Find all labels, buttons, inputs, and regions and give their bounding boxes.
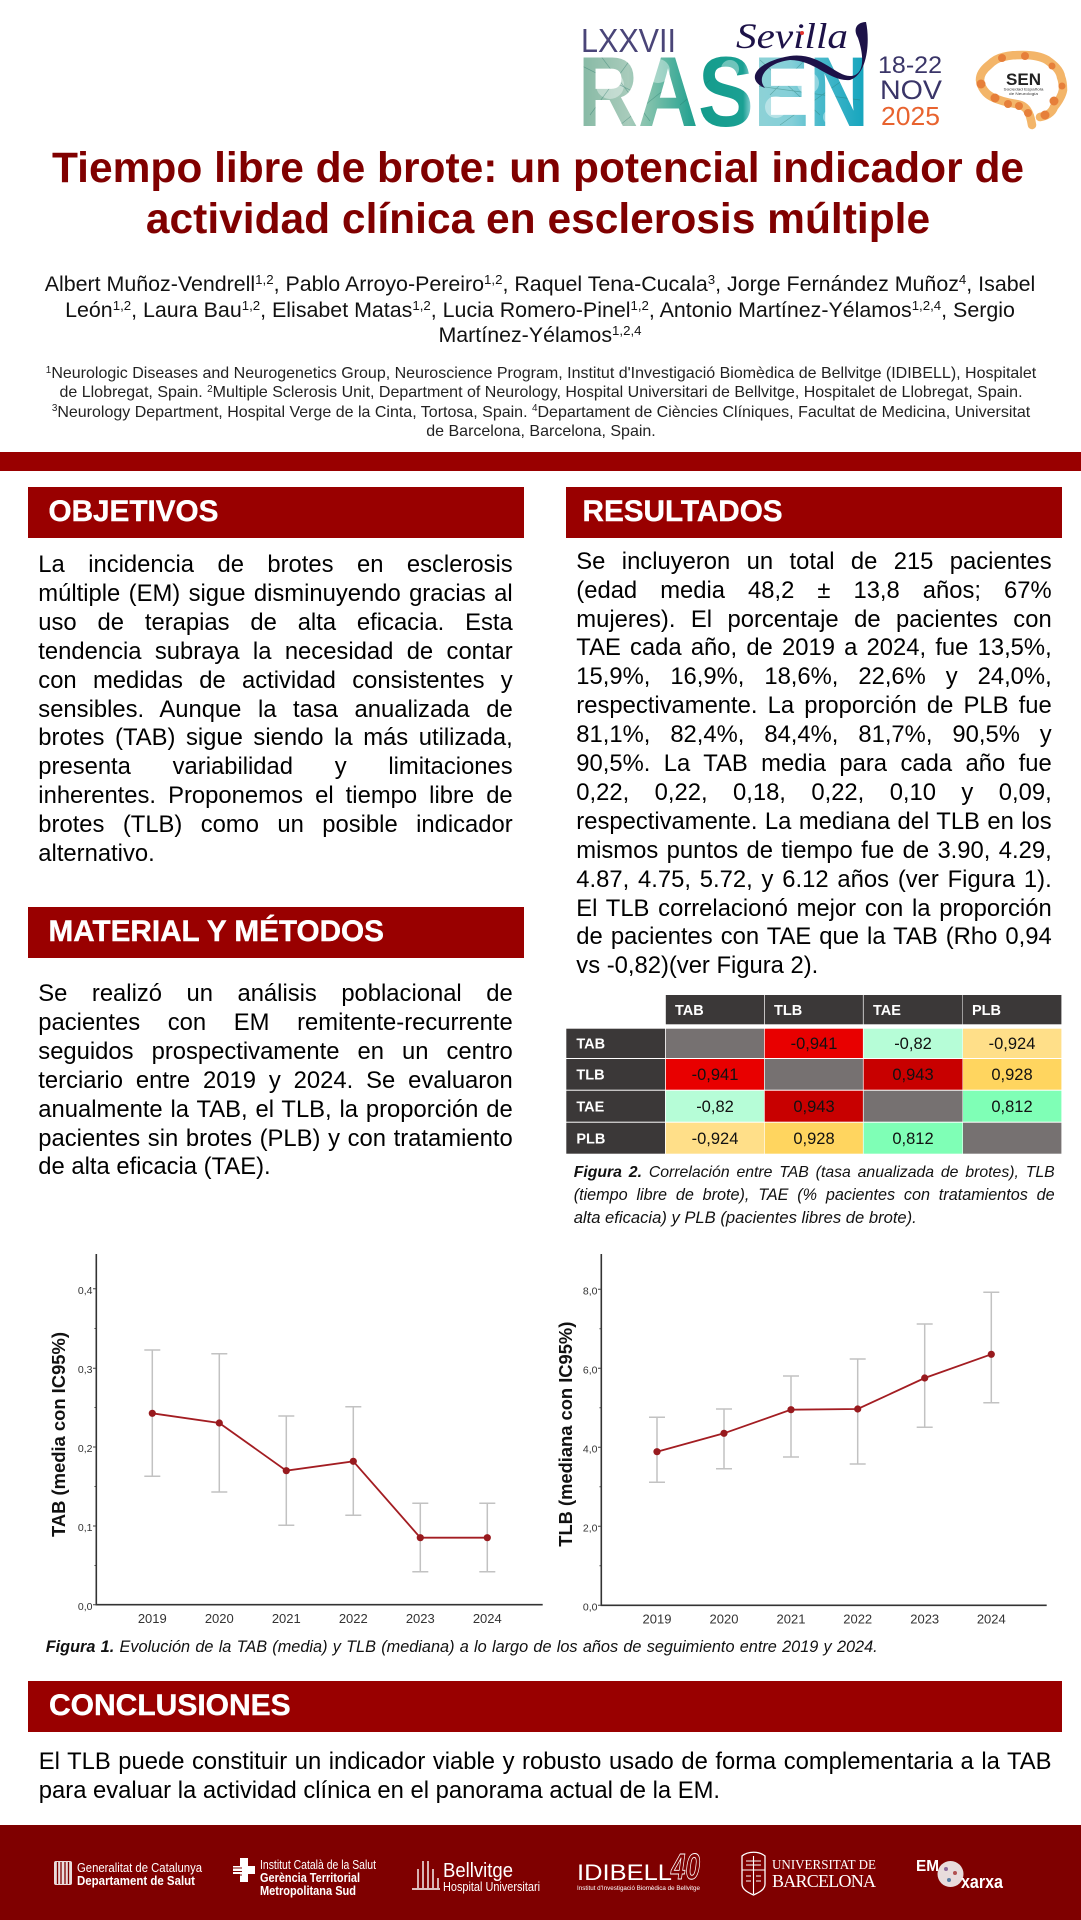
table: correlation matrix: -0,924 <box>989 1035 1035 1053</box>
x tick labels: 2023 <box>406 1611 435 1626</box>
logo: Institut Català de la Salut: Gerència Territorial <box>260 1871 360 1885</box>
text: material y métodos: anualmente la TAB, el TLB, la proporción de <box>38 1096 513 1123</box>
text: resultados: 81,1%, 82,4%, 84,4%, 81,7%, 90,5% y <box>576 721 1052 748</box>
logo: IDIBELL: IDIBELL <box>577 1860 672 1885</box>
y tick labels <box>78 1285 93 1613</box>
y tick labels: 0,0 <box>78 1601 93 1613</box>
logo: Generalitat de Catalunya: Generalitat de Catalunya <box>77 1861 202 1875</box>
table: correlation matrix: TLB <box>774 1003 802 1019</box>
logo: Universitat de Barcelona: BARCELONA <box>772 1871 876 1891</box>
chart: TAB media con IC95% <box>48 1254 543 1626</box>
heading: conclusiones <box>28 1681 1062 1732</box>
table: correlation matrix: TAE <box>873 1003 901 1019</box>
affiliations: de Barcelona, Barcelona, Spain. <box>426 423 656 440</box>
axes <box>601 1254 1047 1605</box>
text: conclusiones: El TLB puede constituir un indicador viable y robusto usado de forma complementaria a la TAB <box>39 1748 1051 1775</box>
x tick labels: 2020 <box>205 1611 234 1626</box>
table: correlation matrix: 0,812 <box>991 1098 1033 1116</box>
icon: red star dot <box>800 31 804 35</box>
text: material y métodos <box>38 980 513 1180</box>
text: resultados: de pacientes con TAE que la TAB (Rho 0,94 <box>576 923 1052 950</box>
data points <box>653 1351 995 1455</box>
x tick labels: 2022 <box>843 1612 872 1626</box>
title: Tiempo libre de brote: un potencial indicador de <box>52 145 1024 192</box>
logo: Universitat de Barcelona <box>742 1852 876 1895</box>
y axis title: TAB (media con IC95%) <box>48 1332 69 1537</box>
text: objetivos: con medidas de actividad consistentes y <box>38 667 513 694</box>
y tick labels: 0,4 <box>78 1285 93 1297</box>
text: resultados: 0,22, 0,22, 0,18, 0,22, 0,10 y 0,09, <box>576 779 1052 806</box>
heading: objetivos: OBJETIVOS <box>48 495 218 528</box>
y tick labels <box>583 1286 598 1614</box>
data line <box>657 1354 991 1452</box>
y tick labels: 4,0 <box>583 1444 598 1456</box>
text: 18-22: 18-22 <box>878 52 942 79</box>
y tick labels: 0,2 <box>78 1443 93 1455</box>
text: objetivos: brotes (TLB) como un posible indicador <box>38 811 513 838</box>
text: resultados: respectivamente. La proporción de PLB fue <box>576 692 1052 719</box>
logo: LXXVII RASEN Sevilla 18-22 NOV 2025 <box>578 16 1068 147</box>
error bars <box>144 1350 495 1572</box>
text: resultados: mujeres). El porcentaje de pacientes con <box>576 606 1052 632</box>
text: objetivos: múltiple (EM) sigue disminuyendo gracias al <box>38 580 513 607</box>
table: correlation matrix: 0,928 <box>991 1066 1033 1084</box>
logo: Institut Català de la Salut <box>233 1858 376 1898</box>
text: resultados: respectivamente. La mediana del TLB en los <box>576 808 1052 835</box>
text: resultados: (edad media 48,2 ± 13,8 años; 67% <box>576 577 1052 604</box>
authors: León1,2, Laura Bau1,2, Elisabet Matas1,2, Lucia Romero-Pinel1,2, Antonio Martínez-Yélamos1,2,4, Sergio <box>65 298 1015 322</box>
y tick labels: 8,0 <box>583 1286 598 1298</box>
affiliations: 3Neurology Department, Hospital Verge de la Cinta, Tortosa, Spain. 4Departament de Ciències Clíniques, Facultat de Medicina, Universitat <box>52 403 1030 421</box>
authors: Martínez-Yélamos1,2,4 <box>438 323 642 347</box>
logo: EM xarxa <box>916 1858 1004 1892</box>
text: objetivos: inherentes. Proponemos el tiempo libre de <box>38 782 513 809</box>
text: objetivos: brotes (TAB) sigue siendo la más utilizada, <box>38 724 513 751</box>
caption: figura 2: alta eficacia) y PLB (pacientes libres de brote). <box>574 1208 917 1227</box>
text: de Neurología: de Neurología <box>1009 92 1039 96</box>
text: resultados: 15,9%, 16,9%, 18,6%, 22,6% y 24,0%, <box>576 663 1052 690</box>
table: correlation matrix <box>566 995 1062 1154</box>
x tick labels <box>643 1612 1006 1626</box>
logo: IDIBELL: Institut d'Investigació Biomèdica de Bellvitge <box>577 1885 700 1892</box>
text: Sevilla: Sevilla <box>736 16 848 56</box>
x tick labels: 2021 <box>777 1612 805 1626</box>
text: resultados: 90,5%. La TAB media para cada año fue <box>576 750 1052 777</box>
title: actividad clínica en esclerosis múltiple <box>146 196 930 243</box>
text: resultados <box>576 548 1052 979</box>
y axis title: TLB (mediana con IC95%) <box>555 1322 576 1547</box>
logo: Generalitat de Catalunya: Departament de Salut <box>77 1874 196 1888</box>
data line <box>152 1413 487 1538</box>
table: correlation matrix: -0,82 <box>696 1098 734 1116</box>
text: 2025: 2025 <box>881 101 940 131</box>
x tick labels: 2019 <box>643 1612 671 1626</box>
table: correlation matrix: PLB <box>576 1132 605 1148</box>
table: correlation matrix: -0,924 <box>692 1130 738 1148</box>
logo: IDIBELL: 40 <box>670 1846 700 1887</box>
logo: Universitat de Barcelona: UNIVERSITAT DE <box>772 1858 876 1873</box>
heading: material y métodos: MATERIAL Y MÉTODOS <box>48 915 384 948</box>
table: correlation matrix: 0,943 <box>793 1098 835 1116</box>
header divider band <box>0 452 1081 471</box>
y tick labels: 6,0 <box>583 1364 598 1376</box>
text: objetivos: alternativo. <box>38 840 155 867</box>
table: correlation matrix: -0,941 <box>791 1035 837 1053</box>
logo: Institut Català de la Salut: Metropolitana Sud <box>260 1884 356 1898</box>
x tick labels: 2023 <box>910 1612 939 1626</box>
table: correlation matrix: TAB <box>675 1003 704 1019</box>
caption: figura 1: Figura 1. Evolución de la TAB (media) y TLB (mediana) a lo largo de los años de seguimiento entre 2019 y 2024. <box>46 1638 878 1656</box>
affiliations <box>46 365 1036 440</box>
table: correlation matrix: TLB <box>576 1068 605 1084</box>
affiliations: 1Neurologic Diseases and Neurogenetics Group, Neuroscience Program, Institut d'Investigació Biomèdica de Bellvitge (IDIBELL), Hospitalet <box>46 365 1036 382</box>
table: correlation matrix: 0,943 <box>892 1066 934 1084</box>
text: resultados: El TLB correlacionó mejor con la proporción <box>576 895 1052 922</box>
text: material y métodos: de alta eficacia (TAE). <box>38 1153 271 1180</box>
footer band with institutional logos <box>0 1825 1081 1920</box>
logo: Bellvitge <box>412 1860 540 1894</box>
heading: resultados <box>566 487 1062 538</box>
text: Sociedad Española: Sociedad Española <box>1004 88 1045 92</box>
x tick labels: 2024 <box>473 1611 502 1626</box>
table: correlation matrix: -0,941 <box>692 1066 738 1084</box>
text: resultados: TAE cada año, de 2019 a 2024, fue 13,5%, <box>576 634 1052 661</box>
chart: TLB mediana con IC95% <box>555 1254 1047 1626</box>
data points <box>149 1410 491 1541</box>
text: objetivos: tendencia subraya la necesidad de contar <box>38 638 513 665</box>
heading: conclusiones: CONCLUSIONES <box>49 1689 291 1722</box>
y tick labels: 0,3 <box>78 1364 93 1376</box>
text: resultados: mismos puntos de tiempo fue de 3.90, 4.29, <box>576 837 1052 864</box>
x tick labels: 2019 <box>138 1611 167 1626</box>
text: resultados: 4.87, 4.75, 5.72, y 6.12 años (ver Figura 1). <box>576 866 1052 893</box>
logo: EM xarxa: EM <box>916 1858 939 1875</box>
table: correlation matrix: 0,928 <box>793 1130 835 1148</box>
text: resultados: Se incluyeron un total de 215 pacientes <box>576 548 1052 575</box>
table: correlation matrix: PLB <box>972 1003 1001 1019</box>
logo: Generalitat de Catalunya <box>54 1861 202 1888</box>
text: material y métodos: terciario entre 2019 y 2024. Se evaluaron <box>38 1067 513 1094</box>
logo: IDIBELL <box>577 1846 700 1892</box>
x tick labels: 2022 <box>339 1611 368 1626</box>
caption: figura 2: Figura 2. Correlación entre TAB (tasa anualizada de brotes), TLB <box>574 1164 1055 1181</box>
caption: figura 2 <box>574 1164 1055 1227</box>
text: LXXVII: LXXVII <box>581 23 676 60</box>
text: objetivos: La incidencia de brotes en esclerosis <box>38 551 513 578</box>
table: correlation matrix: 0,812 <box>892 1130 934 1148</box>
text: SEN: SEN <box>1006 70 1041 89</box>
y tick labels: 0,1 <box>78 1522 93 1534</box>
text: material y métodos: seguidos prospectivamente en un centro <box>38 1038 513 1065</box>
table: correlation matrix: TAB <box>576 1036 605 1052</box>
x tick labels: 2021 <box>272 1611 301 1626</box>
text: material y métodos: Se realizó un análisis poblacional de <box>38 980 513 1007</box>
table: correlation matrix: TAE <box>576 1100 605 1116</box>
text: conclusiones <box>39 1748 1051 1804</box>
table: correlation matrix: -0,82 <box>894 1035 932 1053</box>
y tick labels: 2,0 <box>583 1522 598 1534</box>
logo: Institut Català de la Salut: Institut Català de la Salut <box>260 1858 376 1872</box>
y tick labels: 0,0 <box>583 1602 598 1614</box>
affiliations: de Llobregat, Spain. 2Multiple Sclerosis Unit, Department of Neurology, Hospital Universitari de Bellvitge, Hospitalet de Llobregat, Spain. <box>59 384 1023 401</box>
text: objetivos: sensibles. Aunque la tasa anualizada de <box>38 696 513 723</box>
logo: SEN brain <box>976 52 1066 125</box>
text: resultados: vs -0,82)(ver Figura 2). <box>576 952 818 979</box>
heading: objetivos <box>28 487 524 538</box>
heading: material y métodos <box>28 907 524 958</box>
text: RASEN: RASEN <box>578 36 869 147</box>
text: objetivos <box>38 551 513 867</box>
icon: swoosh <box>755 22 868 88</box>
x tick labels: 2020 <box>710 1612 738 1626</box>
title <box>52 145 1024 243</box>
authors: Albert Muñoz-Vendrell1,2, Pablo Arroyo-Pereiro1,2, Raquel Tena-Cucala3, Jorge Fernández Muñoz4, Isabel <box>45 272 1035 296</box>
text: NOV: NOV <box>880 75 942 105</box>
text: objetivos: uso de terapias de alta eficacia. Esta <box>38 609 513 636</box>
text: material y métodos: pacientes con EM remitente-recurrente <box>38 1009 513 1036</box>
text: objetivos: presenta variabilidad y limitaciones <box>38 753 513 780</box>
x tick labels: 2024 <box>977 1612 1006 1626</box>
heading: resultados: RESULTADOS <box>582 495 783 528</box>
error bars <box>649 1292 999 1482</box>
logo: Bellvitge: Hospital Universitari <box>443 1879 540 1894</box>
text: conclusiones: para evaluar la actividad clínica en el panorama actual de la EM. <box>39 1777 720 1804</box>
logo: EM xarxa: xarxa <box>961 1872 1004 1892</box>
axes <box>96 1254 543 1605</box>
authors <box>44 272 1035 347</box>
logo: Bellvitge: Bellvitge <box>443 1860 513 1882</box>
caption: figura 2: (tiempo libre de brote), TAE (% pacientes con tratamientos de <box>574 1186 1055 1204</box>
x tick labels <box>138 1611 502 1626</box>
text: material y métodos: pacientes sin brotes (PLB) y con tratamiento <box>38 1125 513 1152</box>
